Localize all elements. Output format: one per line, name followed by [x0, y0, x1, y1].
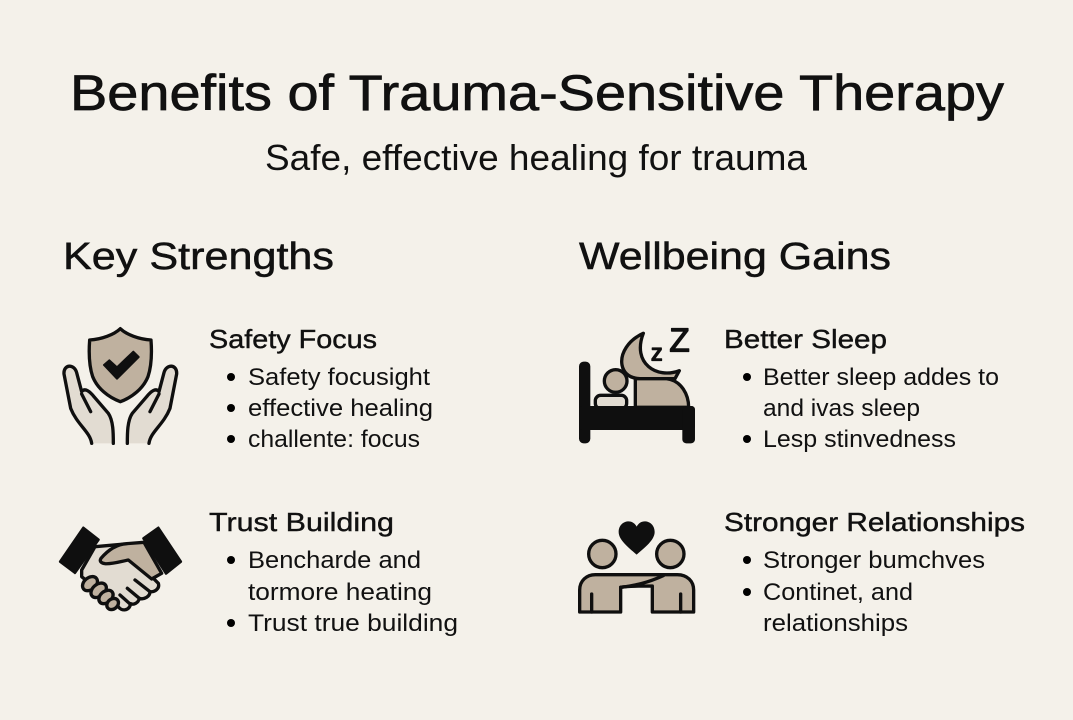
- item: stronger relationships: [724, 507, 1025, 637]
- item: trust building: Bencharde and: [248, 547, 421, 574]
- item: better sleep: [724, 324, 999, 453]
- item: safety focus: effective healing: [248, 395, 433, 422]
- item: trust building: Trust Building: [209, 507, 394, 537]
- title: Benefits of Trauma-Sensitive Therapy: [70, 65, 1004, 121]
- item: trust building: Trust true building: [248, 610, 458, 637]
- item: safety focus: Safety focusight: [248, 364, 430, 391]
- item: trust building: [209, 507, 458, 637]
- icon: bed with sleeper and moon: [579, 323, 695, 443]
- item: safety focus: [209, 324, 433, 453]
- item: better sleep: Lesp stinvedness: [763, 426, 956, 453]
- item: better sleep: and ivas sleep: [763, 395, 920, 422]
- icon: shield and hands: [64, 329, 177, 443]
- item: stronger relationships: Continet, and: [763, 579, 913, 606]
- item: stronger relationships: relationships: [763, 610, 908, 637]
- item: better sleep: Better sleep addes to: [763, 364, 999, 391]
- heading: wellbeing gains: Wellbeing Gains: [579, 236, 891, 278]
- icon: handshake: [60, 528, 181, 612]
- item: better sleep: Better Sleep: [724, 324, 887, 354]
- item: trust building: tormore heating: [248, 579, 432, 606]
- icon: bed with sleeper and moon: z: [651, 340, 663, 366]
- item: safety focus: Safety Focus: [209, 324, 377, 354]
- icon: bed with sleeper and moon: Z: [669, 323, 690, 360]
- item: stronger relationships: Stronger Relationships: [724, 507, 1025, 537]
- icon: two people with heart: [580, 521, 694, 612]
- item: stronger relationships: Stronger bumchves: [763, 547, 985, 574]
- item: safety focus: challente: focus: [248, 426, 420, 453]
- heading: key strengths: Key Strengths: [63, 236, 334, 278]
- subtitle: Safe, effective healing for trauma: [265, 137, 808, 178]
